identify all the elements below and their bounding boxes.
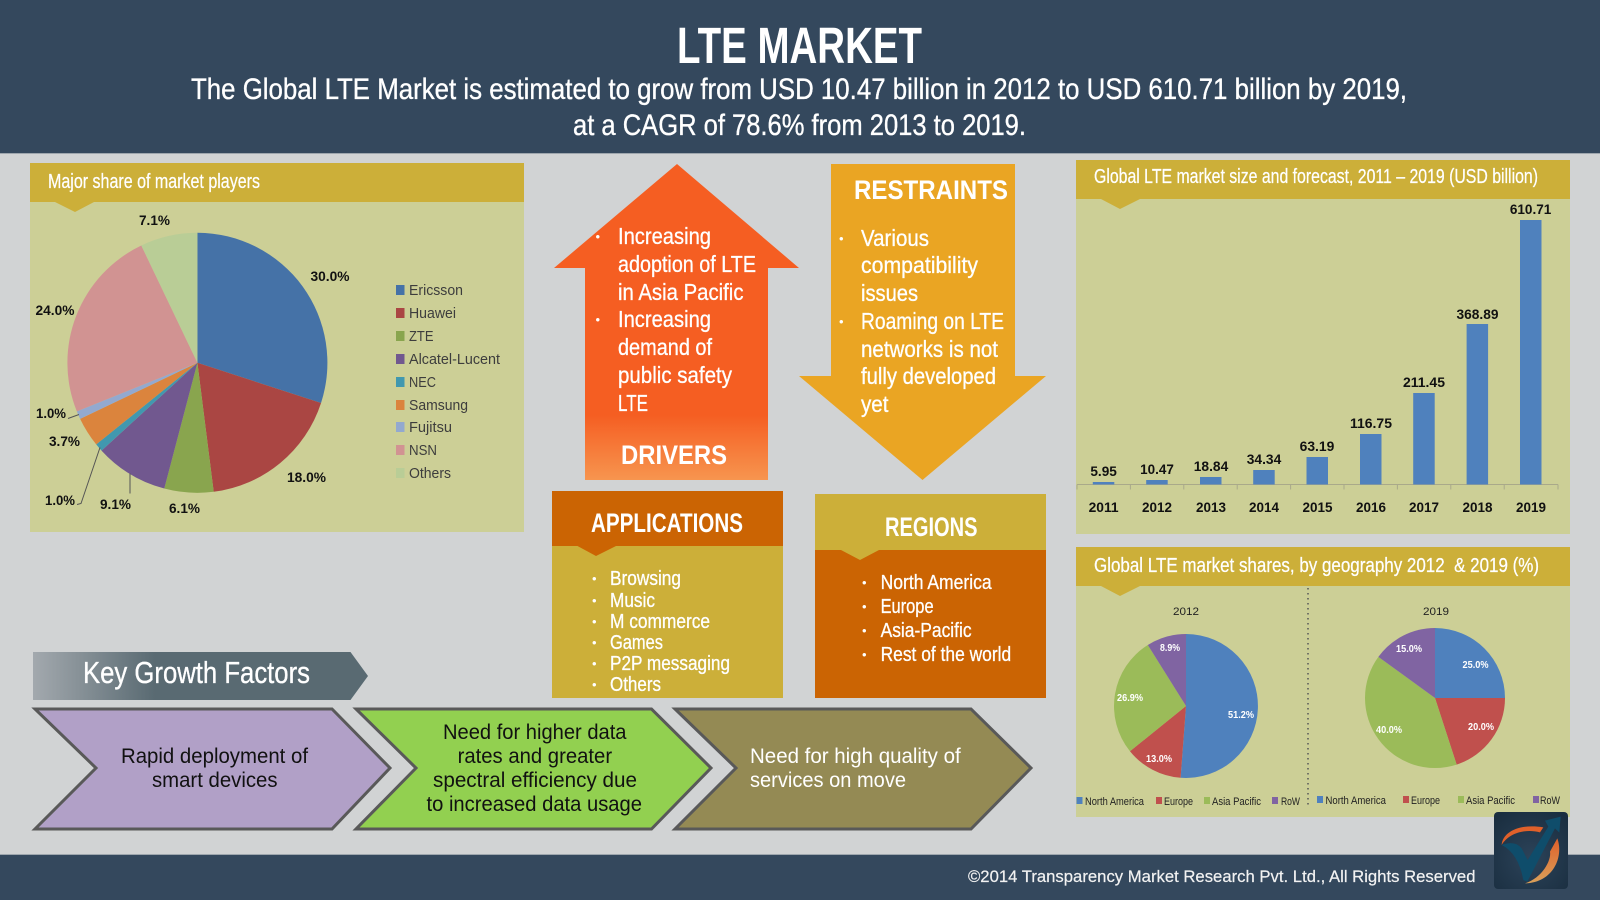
chevron: higher data rates: spectral efficiency due — [433, 769, 637, 792]
chevron: quality of services: services on move — [750, 769, 906, 792]
regions list: Asia-Pacific — [881, 620, 972, 642]
bar value labels: 10.47 — [1140, 461, 1174, 477]
pie legend: Others — [409, 465, 451, 482]
restraints list: compatibility — [861, 252, 978, 278]
legend: 2019: North America — [1326, 795, 1387, 807]
legend: 2012: RoW — [1281, 796, 1300, 808]
bar axis years — [1089, 499, 1546, 515]
bar value labels — [1090, 201, 1552, 479]
regions list: Europe — [881, 596, 934, 618]
pie legend: Ericsson — [409, 282, 463, 299]
legend: 2012: North America — [1085, 796, 1145, 808]
pie legend: NEC — [409, 374, 436, 391]
bar value labels: 116.75 — [1350, 415, 1392, 431]
banner: key growth factors: Key Growth Factors — [83, 655, 310, 690]
legend: 2012 — [1076, 796, 1300, 808]
drivers list: Increasing — [618, 223, 711, 249]
drivers list: demand of — [618, 334, 713, 360]
restraints list: Various — [861, 225, 929, 251]
drivers list: LTE — [618, 390, 648, 416]
applications list: • — [592, 593, 597, 608]
pie chart: 2012: 13.0% — [1146, 754, 1172, 765]
legend: 2019: RoW — [1540, 795, 1560, 807]
bar axis years: 2016 — [1356, 499, 1386, 515]
arrow: restraints — [799, 164, 1046, 480]
restraints list: Roaming on LTE — [861, 308, 1004, 334]
applications list: Games — [610, 632, 663, 654]
chevron: higher data rates: rates and greater — [458, 745, 612, 768]
pie value labels: 18.0% — [287, 469, 327, 485]
legend: 2019 — [1317, 795, 1560, 807]
pie legend: Fujitsu — [409, 419, 452, 436]
drivers list: adoption of LTE — [618, 251, 756, 277]
subtitle — [191, 73, 1407, 142]
chevron: quality of services: Need for high quality of — [750, 745, 961, 768]
bar chart: market size — [1077, 220, 1558, 490]
restraints list: fully developed — [861, 363, 996, 389]
restraints heading: RESTRAINTS — [854, 175, 1008, 205]
applications list: Music — [610, 590, 655, 612]
pie chart: 2019 — [1365, 606, 1505, 768]
applications list: • — [592, 635, 597, 650]
pie legend — [396, 282, 501, 482]
bar value labels: 63.19 — [1300, 438, 1335, 454]
panel: market size and forecast — [1076, 160, 1570, 534]
applications list — [592, 568, 730, 696]
regions list: • — [862, 599, 867, 614]
chevron: higher data rates — [356, 709, 711, 829]
bar axis years: 2019 — [1516, 499, 1546, 515]
drivers list: • — [596, 312, 600, 327]
pie chart: market players — [67, 233, 327, 505]
header band — [0, 0, 1600, 154]
bar axis years: 2015 — [1302, 499, 1333, 515]
applications list: • — [592, 656, 597, 671]
bar value labels: 211.45 — [1403, 374, 1445, 390]
pie legend: ZTE — [409, 328, 434, 345]
panel: major share of market players — [30, 163, 524, 532]
applications list: • — [592, 614, 597, 629]
bar value labels: 368.89 — [1456, 306, 1499, 322]
panel: market shares by geography — [1076, 547, 1570, 817]
applications list: • — [592, 571, 597, 586]
drivers list: public safety — [618, 362, 732, 388]
pie chart: 2012: 26.9% — [1117, 693, 1143, 704]
title: LTE MARKET — [677, 17, 922, 74]
restraints list: networks is not — [861, 336, 999, 362]
pie chart: 2012: 8.9% — [1160, 643, 1180, 654]
icon: company logo — [1494, 812, 1568, 889]
subtitle: The Global LTE Market is estimated to grow from USD 10.47 billion in 2012 to USD 610.71 billion by 2019, — [191, 73, 1407, 106]
pie value labels: 3.7% — [49, 433, 81, 449]
pie chart: 2019: 20.0% — [1468, 722, 1494, 733]
pie value labels: 1.0% — [36, 405, 67, 421]
pie value labels: 6.1% — [169, 500, 201, 516]
applications list: Browsing — [610, 568, 681, 590]
legend: 2019: Europe — [1411, 795, 1440, 807]
pie chart: 2012: 2012 — [1173, 606, 1199, 618]
bar axis years: 2011 — [1089, 499, 1119, 515]
bar value labels: 5.95 — [1090, 463, 1117, 479]
arrow: drivers — [554, 164, 799, 480]
banner: key growth factors — [33, 652, 368, 700]
pie value labels: 1.0% — [45, 492, 76, 508]
bar axis years: 2012 — [1142, 499, 1172, 515]
panel heading: market players: Major share of market players — [48, 171, 260, 193]
restraints list: • — [839, 231, 844, 246]
restraints list: issues — [861, 280, 918, 306]
pie chart: 2012 — [1114, 606, 1258, 778]
applications list: P2P messaging — [610, 653, 730, 675]
drivers heading: DRIVERS — [621, 440, 727, 470]
regions list: North America — [881, 572, 992, 594]
drivers list — [596, 223, 756, 416]
bar axis years: 2018 — [1462, 499, 1493, 515]
regions list: • — [862, 623, 867, 638]
restraints list: • — [839, 314, 844, 329]
pie legend: Alcatel-Lucent — [409, 351, 501, 368]
chevron: rapid deployment: Rapid deployment of — [121, 745, 308, 768]
legend: 2012: Asia Pacific — [1212, 796, 1261, 808]
pie chart: 2019: 25.0% — [1462, 660, 1489, 671]
legend: 2012: Europe — [1164, 796, 1193, 808]
drivers list: in Asia Pacific — [618, 279, 744, 305]
pie chart: 2019: 2019 — [1423, 606, 1449, 618]
chevron: higher data rates: to increased data usage — [426, 793, 642, 816]
panel: applications — [552, 491, 783, 698]
pie value labels: 30.0% — [310, 268, 350, 284]
legend: 2019: Asia Pacific — [1466, 795, 1515, 807]
pie value labels: 24.0% — [36, 302, 75, 318]
applications list: M commerce — [610, 611, 710, 633]
applications list: • — [592, 677, 597, 692]
pie legend: Huawei — [409, 305, 456, 322]
subtitle: at a CAGR of 78.6% from 2013 to 2019. — [573, 109, 1026, 142]
regions list: Rest of the world — [881, 644, 1011, 666]
regions list: • — [862, 575, 867, 590]
pie chart: 2019: 15.0% — [1396, 644, 1422, 655]
pie chart: 2012: 51.2% — [1228, 710, 1254, 721]
regions list: • — [862, 647, 867, 662]
applications list: Others — [610, 674, 661, 696]
chevron: quality of services — [675, 709, 1031, 829]
copyright: ©2014 Transparency Market Research Pvt. Ltd., All Rights Reserved — [968, 867, 1476, 886]
restraints list: yet — [861, 391, 889, 417]
drivers list: • — [596, 229, 600, 244]
bar axis years: 2017 — [1409, 499, 1439, 515]
regions list — [862, 572, 1011, 666]
chevron: rapid deployment — [35, 709, 390, 829]
panel: regions — [815, 494, 1046, 698]
bar value labels: 34.34 — [1247, 451, 1281, 467]
pie chart: 2019: 40.0% — [1376, 725, 1402, 736]
drivers list: Increasing — [618, 306, 711, 332]
pie legend: NSN — [409, 442, 437, 459]
applications heading: APPLICATIONS — [591, 508, 743, 538]
bar value labels: 18.84 — [1194, 458, 1228, 474]
pie value labels: 7.1% — [139, 212, 171, 228]
chevron: higher data rates: Need for higher data — [443, 721, 627, 744]
restraints list — [839, 225, 1004, 417]
bar value labels: 610.71 — [1510, 201, 1552, 217]
pie value labels — [36, 212, 350, 516]
footer band — [0, 854, 1600, 900]
pie legend: Samsung — [409, 397, 468, 414]
chevron: rapid deployment: smart devices — [152, 769, 278, 792]
bar axis years: 2013 — [1196, 499, 1226, 515]
pie value labels: 9.1% — [100, 496, 132, 512]
regions heading: REGIONS — [885, 512, 978, 542]
bar axis years: 2014 — [1249, 499, 1279, 515]
